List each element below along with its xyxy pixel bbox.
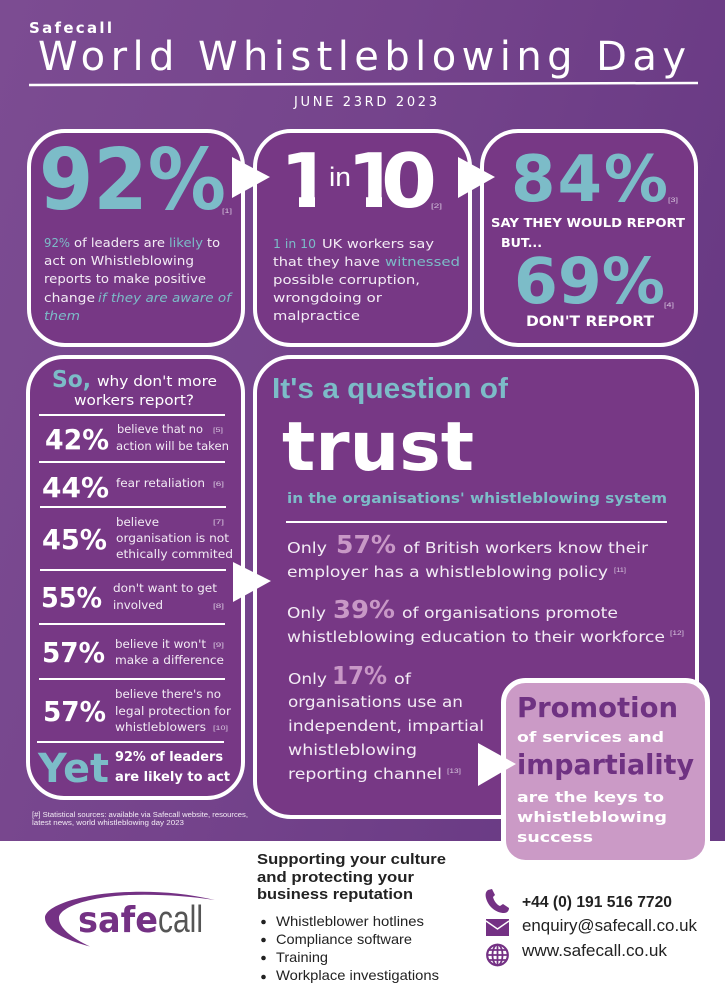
white footer band: [0, 841, 725, 1000]
panel heading: So,: [52, 367, 91, 393]
row: 42%: [5]: [213, 427, 223, 434]
row: 55%: don't want to get: [113, 581, 218, 595]
panel: why don't more workers report: [28, 357, 243, 798]
row: 44%: fear retaliation: [116, 476, 205, 490]
logo: safecall: [45, 892, 215, 946]
row: 45%: [42, 515, 233, 561]
description text: of leaders are: [74, 235, 165, 250]
footnote: [32, 812, 248, 827]
panel heading: workers report?: [74, 393, 194, 409]
don't report: DON'T REPORT: [526, 314, 654, 330]
trust word: trust: [282, 408, 474, 487]
stat 17% independent channel: reporting channel: [288, 765, 442, 783]
logo: safecall: safe: [78, 900, 158, 941]
stat 17% independent channel: [13]: [447, 768, 461, 775]
stat 84%: 84%: [511, 143, 668, 217]
stat 17% independent channel: whistleblowing: [288, 741, 417, 759]
footer heading: business reputation: [257, 886, 413, 903]
stat 17% independent channel: of: [394, 670, 412, 688]
row: 57% difference: [42, 636, 224, 669]
services list: Whistleblower hotlines: [276, 913, 424, 929]
brand name: Safecall: [29, 19, 112, 37]
stat 39% education: [287, 595, 684, 646]
logo: safecall: call: [158, 899, 203, 941]
date: JUNE 23RD 2023: [293, 95, 437, 110]
description text: witnessed: [385, 254, 460, 269]
footer heading: and protecting your: [257, 869, 414, 886]
promotion word: Promotion: [517, 692, 678, 724]
closing text: [517, 790, 667, 846]
big stat 1 in 10: 1: [280, 137, 332, 225]
description text: change: [44, 290, 95, 305]
title: World Whistleblowing Day: [38, 34, 686, 80]
stat 17% independent channel: 17%: [332, 661, 387, 690]
big stat 92%: 92%: [39, 131, 226, 230]
arrow: why to trust: [233, 562, 271, 602]
stat 57% policy: [287, 530, 649, 581]
phone number: +44 (0) 191 516 7720: [522, 894, 672, 911]
stat 57% policy: employer has a whistleblowing policy: [287, 563, 608, 581]
row: 45%: ethically commited: [116, 547, 233, 561]
row: 57% legal protection: legal protection for: [115, 704, 231, 718]
of services and: of services and: [517, 730, 664, 746]
description text: 1 in 10: [273, 236, 316, 251]
row: 42%: 42%: [45, 423, 109, 456]
big stat 1 in 10: 0: [381, 137, 437, 225]
row: yet 92%: [37, 746, 230, 792]
footnote: [#] Statistical sources: available via Safecall website, resources,: [32, 812, 248, 819]
row: 57% difference: make a difference: [115, 653, 224, 667]
description text: that they have: [273, 254, 380, 269]
reference 4: [4]: [664, 302, 674, 309]
services list: [261, 913, 439, 983]
row: 42%: [45, 422, 229, 456]
footer: contact details: [486, 889, 698, 965]
services list: Workplace investigations: [276, 967, 439, 983]
row: 42%: action will be taken: [116, 439, 229, 453]
stat 39% education: [12]: [670, 630, 684, 637]
row: yet 92%: Yet: [37, 746, 109, 792]
arrow: trust to promotion: [478, 743, 516, 786]
row: 45%: believe: [116, 515, 159, 529]
description text: act on Whistleblowing: [44, 253, 194, 268]
closing text: whistleblowing: [517, 810, 667, 826]
subheading: in the organisations' whistleblowing system: [287, 491, 667, 507]
footer heading: Supporting your culture: [257, 851, 446, 868]
panel: 84 percent vs 69 percent: [482, 131, 696, 345]
row: 57% difference: [9]: [213, 642, 224, 649]
row: 45%: organisation is not: [116, 531, 230, 545]
but: BUT...: [501, 236, 542, 250]
panel: 1 in 10 workers: [255, 131, 470, 345]
description text: if they are aware of: [98, 290, 233, 305]
row: yet 92%: 92% of leaders: [115, 750, 223, 765]
title underline: [29, 83, 698, 85]
big stat 1 in 10: in: [329, 162, 351, 192]
row: 57% legal protection: [43, 687, 231, 734]
arrow: 1 in 10 to 84%: [458, 157, 495, 198]
stat 57% policy: of British workers know their: [403, 539, 649, 557]
website: www.safecall.co.uk: [521, 942, 668, 960]
footnote: latest news, world whistleblowing day 2023: [32, 820, 184, 827]
row: 57% legal protection: 57%: [43, 695, 106, 728]
row: yet 92%: are likely to act: [115, 770, 230, 785]
description text: 92%: [44, 235, 70, 250]
header: [29, 19, 698, 110]
panel: 92 percent of leaders: [29, 131, 243, 345]
row: 57% difference: 57%: [42, 636, 105, 669]
stat 39% education: 39%: [333, 595, 395, 624]
description text: malpractice: [273, 308, 360, 323]
reference 3: [3]: [668, 197, 678, 204]
footer: services: [257, 851, 446, 983]
row: 45%: 45%: [42, 523, 107, 556]
row: 55%: [41, 581, 224, 614]
description text: UK workers say: [322, 236, 435, 251]
description text: reports to make positive: [44, 271, 206, 286]
big stat 1 in 10: [288, 151, 434, 208]
stat 17% independent channel: [288, 661, 484, 783]
say they would report: SAY THEY WOULD REPORT: [491, 216, 686, 230]
closing text: success: [517, 830, 593, 846]
row: 55%: involved: [113, 598, 163, 612]
panel heading: why don't more: [97, 374, 217, 390]
row: 57% difference: believe it won't: [115, 637, 207, 651]
description text: likely: [169, 235, 204, 250]
reference 1: [1]: [222, 208, 232, 215]
services list: Compliance software: [276, 931, 412, 947]
impartiality word: impartiality: [517, 749, 694, 781]
stat 57% policy: [11]: [614, 567, 626, 574]
row: 55%: 55%: [41, 581, 102, 614]
row: 57% legal protection: believe there's no: [115, 687, 221, 701]
stat 17% independent channel: organisations use an: [288, 693, 463, 711]
stat 39% education: whistleblowing education to their workforce: [287, 628, 665, 646]
stat 39% education: of organisations promote: [402, 604, 618, 622]
description text: possible corruption,: [273, 272, 420, 287]
panel: promotion callout: [504, 680, 708, 862]
services list: Training: [276, 949, 328, 965]
row: 44%: [42, 471, 224, 504]
row: 45%: [7]: [213, 519, 224, 526]
description text: [44, 235, 233, 323]
stat 39% education: Only: [287, 604, 326, 622]
row: 57% legal protection: whistleblowers: [115, 720, 206, 734]
stat 17% independent channel: independent, impartial: [288, 717, 484, 735]
arrow: 92% to 1 in 10: [232, 157, 270, 198]
stat 57% policy: 57%: [336, 530, 396, 559]
description text: them: [44, 308, 80, 323]
row: 57% legal protection: [10]: [213, 725, 228, 732]
icon: phone: [486, 889, 509, 913]
row: 42%: believe that no: [117, 422, 203, 436]
description text: [273, 236, 460, 323]
stat 69%: 69%: [514, 245, 665, 318]
stat 17% independent channel: Only: [288, 670, 327, 688]
closing text: are the keys to: [517, 790, 664, 806]
icon: envelope: [486, 919, 509, 936]
big stat 1 in 10: 1: [347, 137, 399, 225]
email: enquiry@safecall.co.uk: [522, 917, 698, 935]
panel heading: [52, 367, 217, 409]
description text: wrongdoing or: [273, 290, 383, 305]
reference 2: [2]: [431, 203, 442, 210]
panel: question of trust: [255, 357, 697, 817]
icon: globe: [487, 945, 508, 965]
description text: to: [207, 235, 220, 250]
row: 44%: 44%: [42, 471, 109, 504]
stat 57% policy: Only: [287, 539, 327, 557]
row: 55%: [8]: [213, 603, 224, 610]
row: 44%: [6]: [213, 481, 224, 488]
heading: It's a question of: [272, 373, 508, 405]
footer heading: [257, 851, 446, 903]
